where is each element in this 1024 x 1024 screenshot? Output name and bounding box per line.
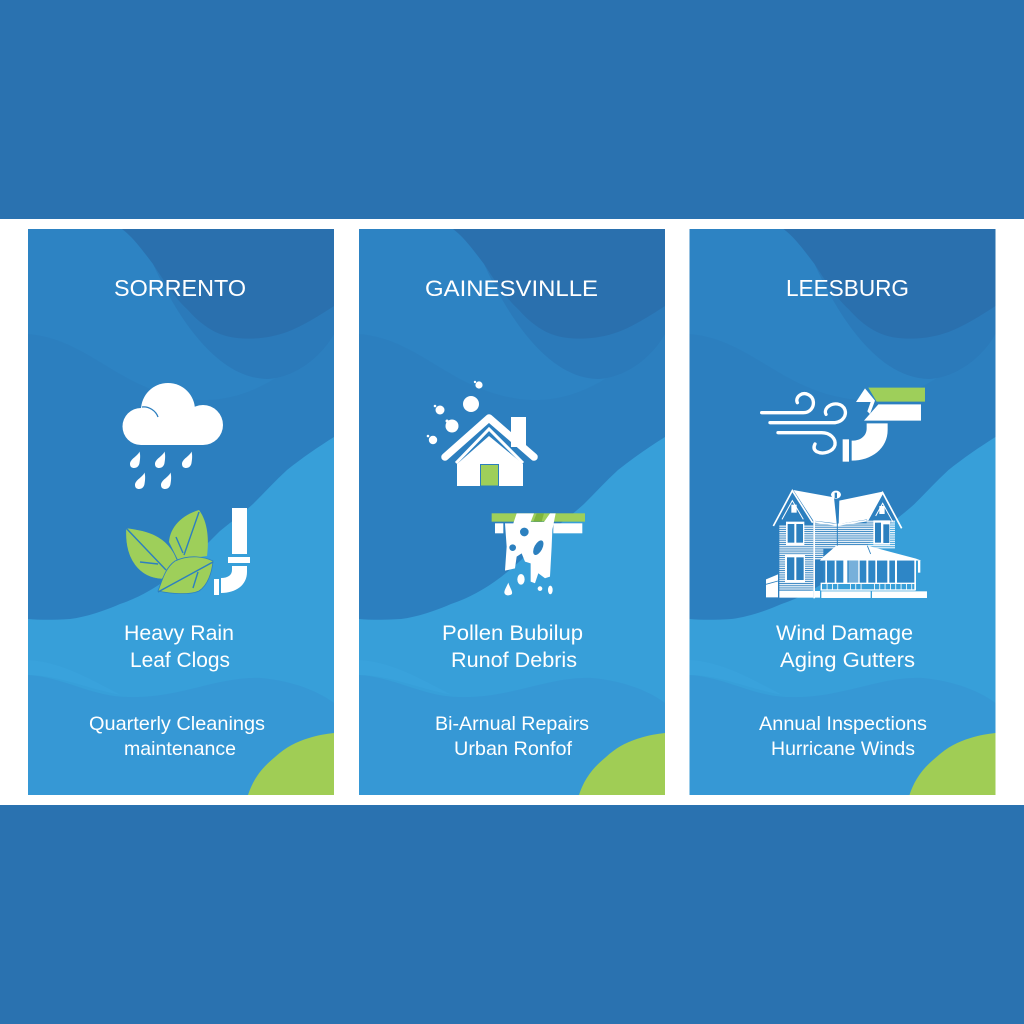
icon: downspout pipe: [214, 508, 250, 595]
causes text: Gainesville: Runof Debris: [451, 649, 577, 672]
causes text: Gainesville: Pollen Bubilup: [442, 622, 583, 645]
panel: Gainesville: [359, 229, 665, 795]
panel: Sorrento: [28, 229, 334, 795]
causes text: Sorrento: Heavy Rain: [124, 622, 234, 645]
causes text: Leesburg: [776, 622, 915, 672]
heading: Sorrento: SORRENTO: [114, 275, 246, 301]
bottom blue band: [0, 805, 1024, 1024]
icon: two-storey house with porch: [766, 490, 927, 598]
maintenance text: Leesburg: [759, 713, 927, 760]
causes text: Leesburg: Wind Damage: [776, 622, 913, 645]
maintenance text: Gainesville: Bi-Arnual Repairs: [435, 713, 589, 735]
heading: Leesburg: LEESBURG: [786, 275, 909, 301]
maintenance text: Leesburg: Annual Inspections: [759, 713, 927, 735]
icon: wind and gutter: [762, 388, 925, 462]
maintenance text: Leesburg: Hurricane Winds: [771, 738, 915, 760]
top blue band: [0, 0, 1024, 219]
icon: rain cloud: [122, 383, 223, 489]
causes text: Sorrento: [124, 622, 234, 672]
panel background: Leesburg: [690, 229, 996, 795]
maintenance text: Sorrento: Quarterly Cleanings: [89, 713, 265, 735]
heading: Gainesville: GAINESVINLLE: [425, 276, 598, 301]
icon: clogged gutter: [492, 513, 585, 595]
causes text: Gainesville: [442, 622, 583, 672]
maintenance text: Gainesville: Urban Ronfof: [454, 738, 573, 760]
white content strip: [0, 219, 1024, 805]
icon: green leaves: [126, 510, 213, 594]
panel background: Sorrento: [28, 229, 334, 795]
panel: Leesburg: [690, 229, 996, 795]
causes text: Leesburg: Aging Gutters: [780, 649, 915, 672]
maintenance text: Gainesville: [435, 713, 589, 760]
maintenance text: Sorrento: maintenance: [124, 738, 236, 760]
maintenance text: Sorrento: [89, 713, 265, 760]
causes text: Sorrento: Leaf Clogs: [130, 649, 230, 672]
panel background: Gainesville: [359, 229, 665, 795]
icon: house with pollen: [427, 381, 534, 486]
